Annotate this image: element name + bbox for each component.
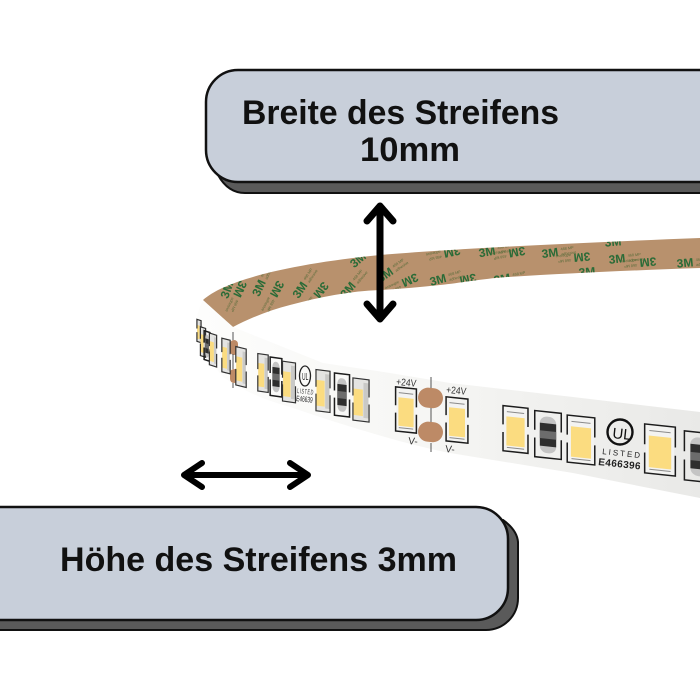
strip back with adhesive tape: adhesive: [384, 280, 400, 290]
strip back with adhesive tape: 468 MP: [352, 269, 364, 282]
strip back with adhesive tape: 3M: [218, 280, 236, 300]
strip front face: [196, 301, 700, 498]
UL listed marks: LISTED: [297, 388, 314, 397]
polarity labels: +24V: [446, 384, 467, 397]
UL listed marks: [296, 366, 643, 472]
LED strip: [196, 234, 700, 498]
heading: strip width: Breite des Streifens: [242, 94, 559, 132]
strip back with adhesive tape: 3M: [374, 264, 396, 286]
strip back with adhesive tape: 468 MP: [227, 266, 235, 280]
strip back with adhesive tape: 468 MP: [265, 299, 275, 313]
polarity labels: [396, 376, 467, 456]
UL listed marks: E466396: [598, 457, 641, 472]
solder pads: [230, 340, 444, 443]
strip back with adhesive tape: 3M: [508, 244, 526, 260]
UL listed marks: UL: [302, 371, 309, 383]
LEDs and resistors: [197, 319, 700, 483]
strip back with adhesive tape: 468 MP: [230, 299, 239, 313]
strip back with adhesive tape: 468 MP: [448, 270, 462, 277]
strip back with adhesive tape: 468 MP: [260, 264, 269, 278]
strip back with adhesive tape: adhesive: [490, 249, 506, 256]
strip back with adhesive tape: adhesive: [628, 257, 644, 263]
strip back with adhesive tape: adhesive: [265, 265, 275, 280]
strip back with adhesive tape: 468 MP: [493, 254, 507, 260]
strip back with adhesive tape: adhesive: [356, 271, 369, 285]
strip back with adhesive tape: adhesive: [232, 266, 241, 281]
strip back with adhesive tape: 3M: [230, 278, 250, 300]
panel shadow: [218, 170, 700, 193]
strip back with adhesive tape: 468 MP: [497, 244, 511, 250]
strip back with adhesive tape: adhesive: [513, 275, 529, 282]
strip back with adhesive tape: 3M: [290, 279, 310, 301]
arrow: strip width: [367, 206, 393, 319]
strip back with adhesive tape: 468 MP: [392, 258, 405, 269]
strip back with adhesive tape: 3M: [267, 278, 287, 300]
strip back with adhesive tape: 3M: [541, 245, 559, 261]
UL listed marks: E46639: [296, 395, 313, 405]
strip back with adhesive tape: 3M: [249, 277, 269, 299]
panel body: [0, 507, 508, 620]
strip back with adhesive tape: adhesive: [301, 296, 313, 310]
strip back with adhesive tape: 3M: [337, 279, 359, 301]
strip back with adhesive tape: 3M: [310, 279, 332, 301]
panel shadow: [0, 520, 518, 630]
heading: strip height: Höhe des Streifens 3mm: [60, 541, 457, 579]
strip back with adhesive tape: adhesive: [224, 297, 234, 312]
strip back with adhesive tape: 3M: [604, 234, 622, 250]
arrow: strip height: [184, 463, 308, 487]
panel body: [206, 70, 700, 182]
strip back with adhesive tape: 468 MP: [558, 258, 571, 263]
strip back with adhesive tape: adhesive: [395, 261, 409, 273]
strip back with adhesive tape: 3M: [676, 255, 694, 271]
strip back with adhesive tape: 468 MP: [560, 246, 574, 251]
strip back with adhesive tape: 3M: [399, 270, 421, 290]
strip back with adhesive tape: 3M: [458, 270, 478, 288]
strip back with adhesive tape: 3M: [347, 249, 369, 271]
strip back with adhesive tape: 468 MP: [306, 299, 317, 312]
strip back with adhesive tape: 3M: [442, 243, 462, 261]
panel: strip width label: [206, 70, 700, 193]
strip back with adhesive tape: adhesive: [307, 269, 319, 284]
strip back with adhesive tape: 468 MP: [628, 252, 641, 258]
strip back with adhesive tape: 3M: [639, 254, 657, 270]
strip back with adhesive tape: 3M: [608, 251, 626, 267]
strip back with adhesive tape: 3M: [578, 264, 596, 280]
polarity labels: V-: [445, 444, 455, 456]
polarity labels: V-: [408, 436, 418, 448]
strip back with adhesive tape: [203, 234, 700, 327]
strip back with adhesive tape: 468 MP: [388, 285, 402, 294]
strip back with adhesive tape: adhesive: [621, 258, 637, 263]
strip back with adhesive tape: 3M: [573, 249, 591, 265]
UL listed marks: LISTED: [602, 447, 643, 460]
strip back with adhesive tape: 468 MP: [428, 254, 442, 261]
polarity labels: +24V: [396, 376, 417, 389]
value: 10mm: 10mm: [360, 131, 460, 169]
strip back with adhesive tape: adhesive: [449, 274, 465, 282]
strip back with adhesive tape: adhesive: [425, 249, 441, 256]
strip back with adhesive tape: 468 MP: [624, 263, 637, 268]
strip back with adhesive tape: adhesive: [498, 248, 514, 255]
strip back with adhesive tape: 3M: [428, 271, 448, 289]
UL listed marks: UL: [612, 425, 632, 444]
strip back with adhesive tape: adhesive: [561, 250, 577, 256]
strip back with adhesive tape: 468 MP: [303, 267, 314, 281]
strip back with adhesive tape: 3M: [478, 244, 496, 260]
panel: strip height label: [0, 507, 518, 630]
strip back with adhesive tape: adhesive: [260, 296, 271, 312]
strip back with adhesive tape: 468 MP: [512, 271, 526, 277]
strip back with adhesive tape: adhesive: [555, 253, 571, 258]
strip back with adhesive tape: 3M: [493, 271, 511, 287]
